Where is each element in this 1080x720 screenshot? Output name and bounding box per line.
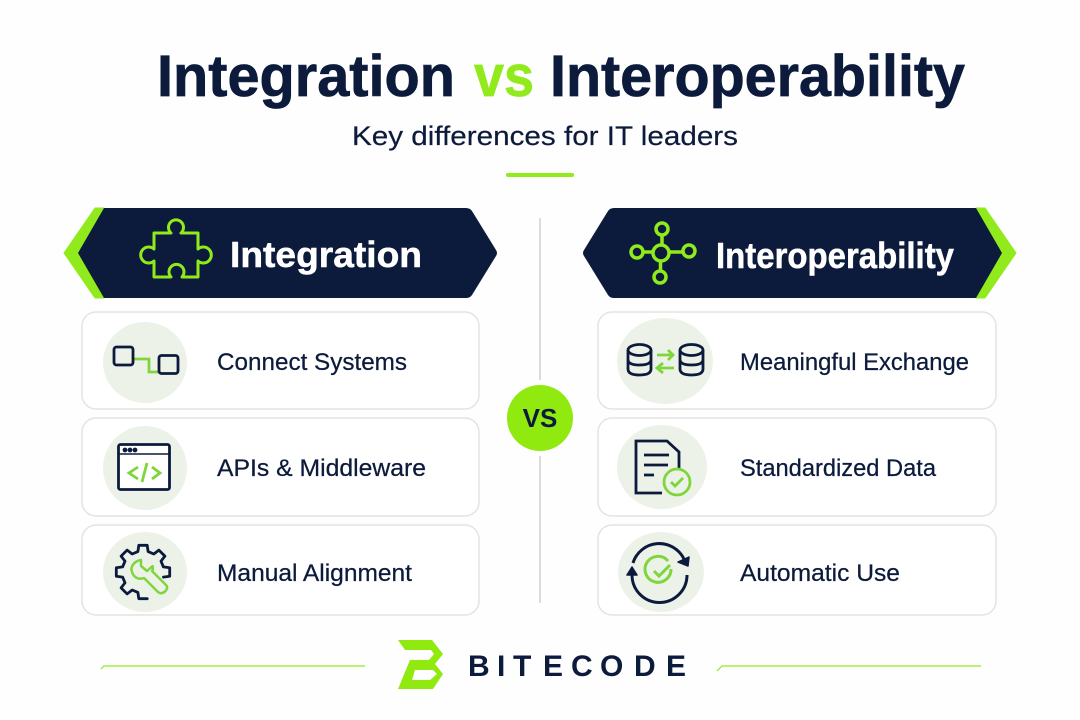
- panel: interoperability: [583, 208, 1016, 615]
- title: vs: [474, 44, 534, 109]
- vs badge: VS: [523, 403, 557, 433]
- card: automatic use: [598, 525, 996, 615]
- card: meaningful exchange: Meaningful Exchange: [740, 349, 969, 376]
- card: manual alignment: Manual Alignment: [217, 560, 412, 587]
- card: manual alignment: [82, 525, 479, 615]
- card: connect systems: [82, 312, 479, 409]
- heading: integration: Integration: [230, 234, 422, 275]
- card: automatic use: Automatic Use: [740, 560, 900, 587]
- title: [157, 44, 965, 109]
- banner: integration: [64, 208, 497, 298]
- subtitle: Key differences for IT leaders: [352, 121, 738, 151]
- brand name: BITECODE: [468, 650, 686, 683]
- icon: network nodes: [631, 223, 695, 283]
- icon: puzzle piece: [141, 220, 211, 277]
- icon: document check: [636, 441, 690, 495]
- icon: gear and wrench: [116, 545, 170, 599]
- footer logo: [101, 640, 981, 689]
- vs badge: [507, 385, 573, 451]
- card: apis and middleware: [82, 418, 479, 516]
- title: Integration: [157, 44, 455, 109]
- card: standardized data: Standardized Data: [740, 455, 937, 482]
- card: apis and middleware: APIs & Middleware: [217, 455, 426, 482]
- card: meaningful exchange: [598, 312, 996, 409]
- icon: connected squares: [114, 347, 178, 374]
- icon: cycle check: [627, 544, 689, 602]
- card: standardized data: [598, 418, 996, 516]
- icon: code window: [118, 444, 170, 490]
- icon: bitecode logo mark: [398, 640, 443, 689]
- card: connect systems: Connect Systems: [217, 349, 407, 376]
- icon: databases exchange: [628, 344, 703, 375]
- banner: interoperability: [583, 208, 1016, 298]
- heading: interoperability: Interoperability: [716, 235, 954, 276]
- panel: integration: [64, 208, 497, 615]
- title: Interoperability: [550, 44, 965, 109]
